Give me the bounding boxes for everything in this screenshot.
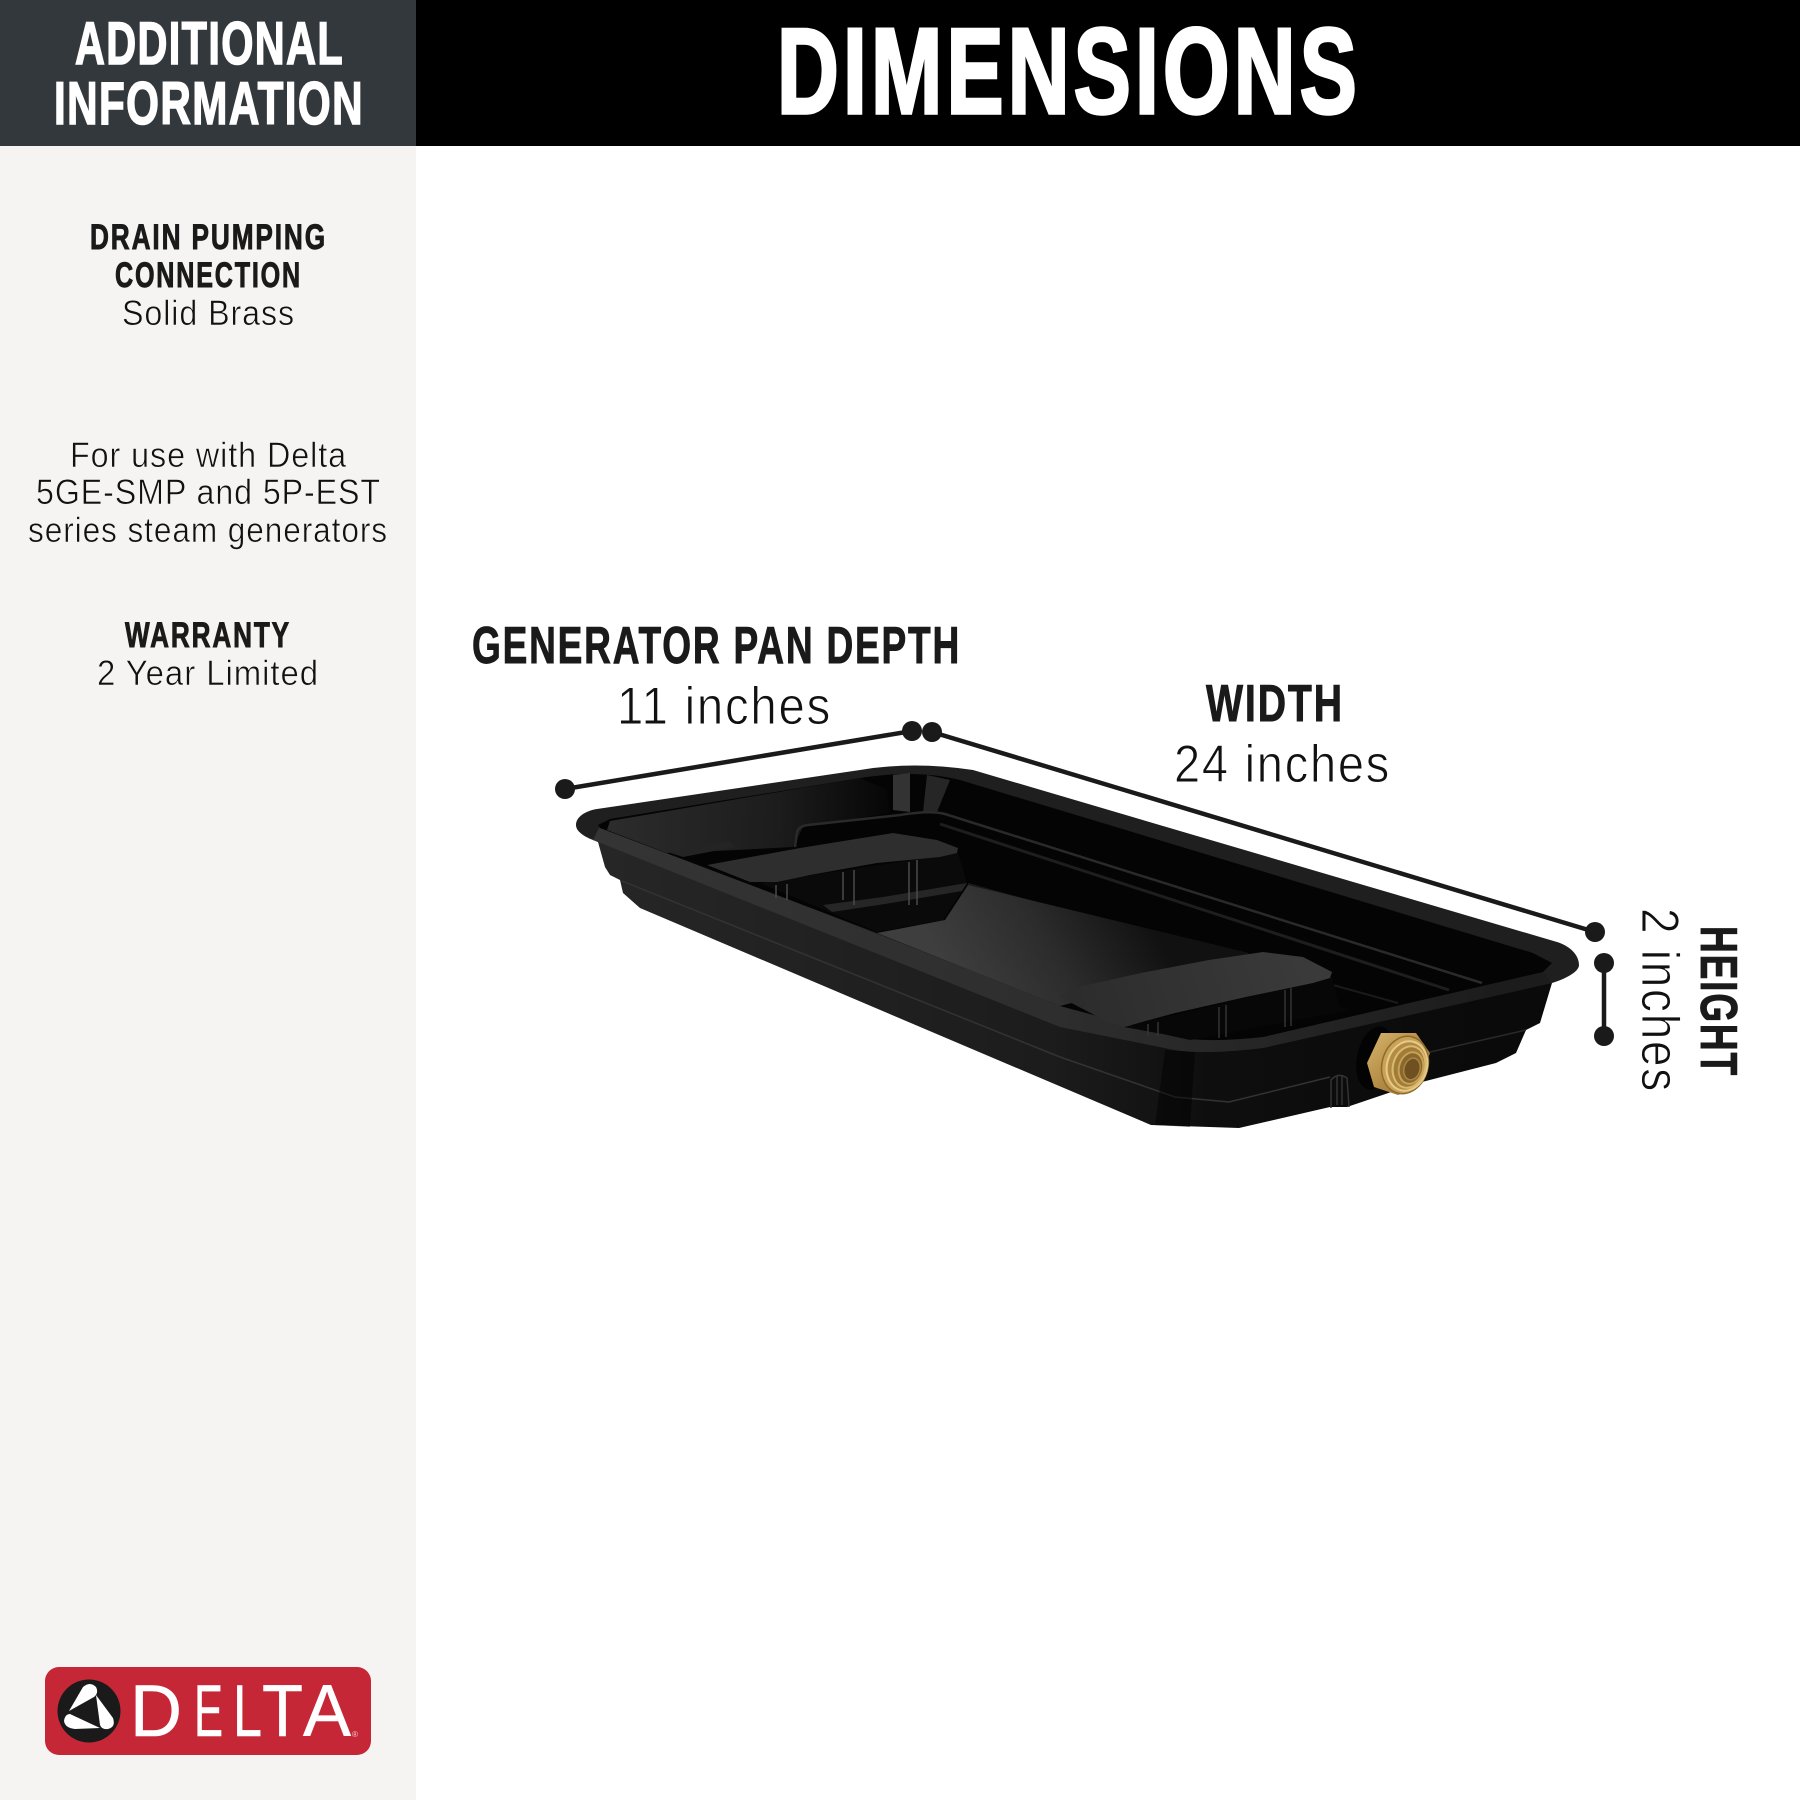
heading: dimensions bbox=[416, 0, 1800, 146]
label: generator pan depth: GENERATOR PAN DEPTH bbox=[472, 617, 961, 675]
text block: drain pumping connection bbox=[90, 218, 327, 333]
label: width bbox=[1174, 675, 1391, 794]
heading: dimensions: DIMENSIONS bbox=[777, 3, 1361, 139]
sidebar heading bbox=[0, 0, 416, 146]
small back ledge bbox=[667, 841, 735, 857]
corner gloss bbox=[923, 775, 950, 812]
text block: drain pumping connection: Solid Brass bbox=[122, 294, 295, 333]
label: height bbox=[1630, 908, 1747, 1093]
pan inner ridges bbox=[795, 812, 1482, 983]
product image: generator drain pan bbox=[576, 766, 1579, 1128]
right platform front bbox=[1124, 977, 1350, 1040]
logo wordmark: A bbox=[303, 1671, 351, 1752]
text block: drain pumping connection: CONNECTION bbox=[115, 256, 302, 295]
label: width: WIDTH bbox=[1206, 675, 1344, 733]
pan cavity bbox=[598, 774, 1552, 1040]
logo wordmark: D bbox=[130, 1671, 182, 1752]
left platform front bbox=[760, 853, 967, 932]
pan outer body bbox=[593, 838, 1552, 1128]
text block: drain pumping connection: DRAIN PUMPING bbox=[90, 218, 327, 257]
text block: compatibility: series steam generators bbox=[28, 511, 388, 550]
text block: warranty: WARRANTY bbox=[125, 616, 291, 655]
dimension line: width bbox=[922, 722, 1605, 942]
text block: warranty bbox=[97, 616, 319, 693]
text block: compatibility: 5GE-SMP and 5P-EST bbox=[36, 473, 381, 512]
drain fitting: solid brass bbox=[1351, 1023, 1435, 1099]
panel: additional information sidebar bbox=[0, 0, 416, 1800]
left platform ribs bbox=[776, 860, 917, 905]
label: generator pan depth: 11 inches bbox=[617, 677, 832, 736]
right raised platform bbox=[1060, 952, 1332, 1027]
pan rim bbox=[576, 766, 1579, 1052]
icon: Delta emblem bbox=[58, 1680, 120, 1742]
text block: compatibility bbox=[28, 436, 388, 550]
body notch detail bbox=[1331, 1075, 1349, 1108]
logo wordmark: ® bbox=[352, 1730, 358, 1739]
logo: Delta bbox=[45, 1667, 371, 1755]
label: height: 2 inches bbox=[1630, 908, 1689, 1093]
label: generator pan depth bbox=[472, 617, 961, 736]
left platform ledge bbox=[823, 883, 967, 912]
label: width: 24 inches bbox=[1174, 735, 1391, 794]
pan floor bbox=[877, 885, 1249, 1006]
logo wordmark: T bbox=[262, 1671, 303, 1752]
sidebar heading: INFORMATION bbox=[54, 70, 364, 137]
logo wordmark: L bbox=[233, 1671, 262, 1752]
dimension line: height bbox=[1594, 953, 1614, 1046]
logo wordmark: E bbox=[194, 1671, 223, 1752]
logo wordmark bbox=[130, 1671, 358, 1752]
label: height: HEIGHT bbox=[1689, 926, 1747, 1077]
text block: compatibility: For use with Delta bbox=[70, 436, 347, 475]
pan back-left wall bbox=[607, 778, 890, 853]
right platform ribs bbox=[1148, 988, 1291, 1038]
sidebar heading: ADDITIONAL bbox=[75, 10, 344, 77]
text block: warranty: 2 Year Limited bbox=[97, 654, 319, 693]
dimension line: depth bbox=[555, 721, 922, 799]
wall gloss bbox=[893, 773, 910, 812]
left raised platform bbox=[707, 833, 958, 882]
